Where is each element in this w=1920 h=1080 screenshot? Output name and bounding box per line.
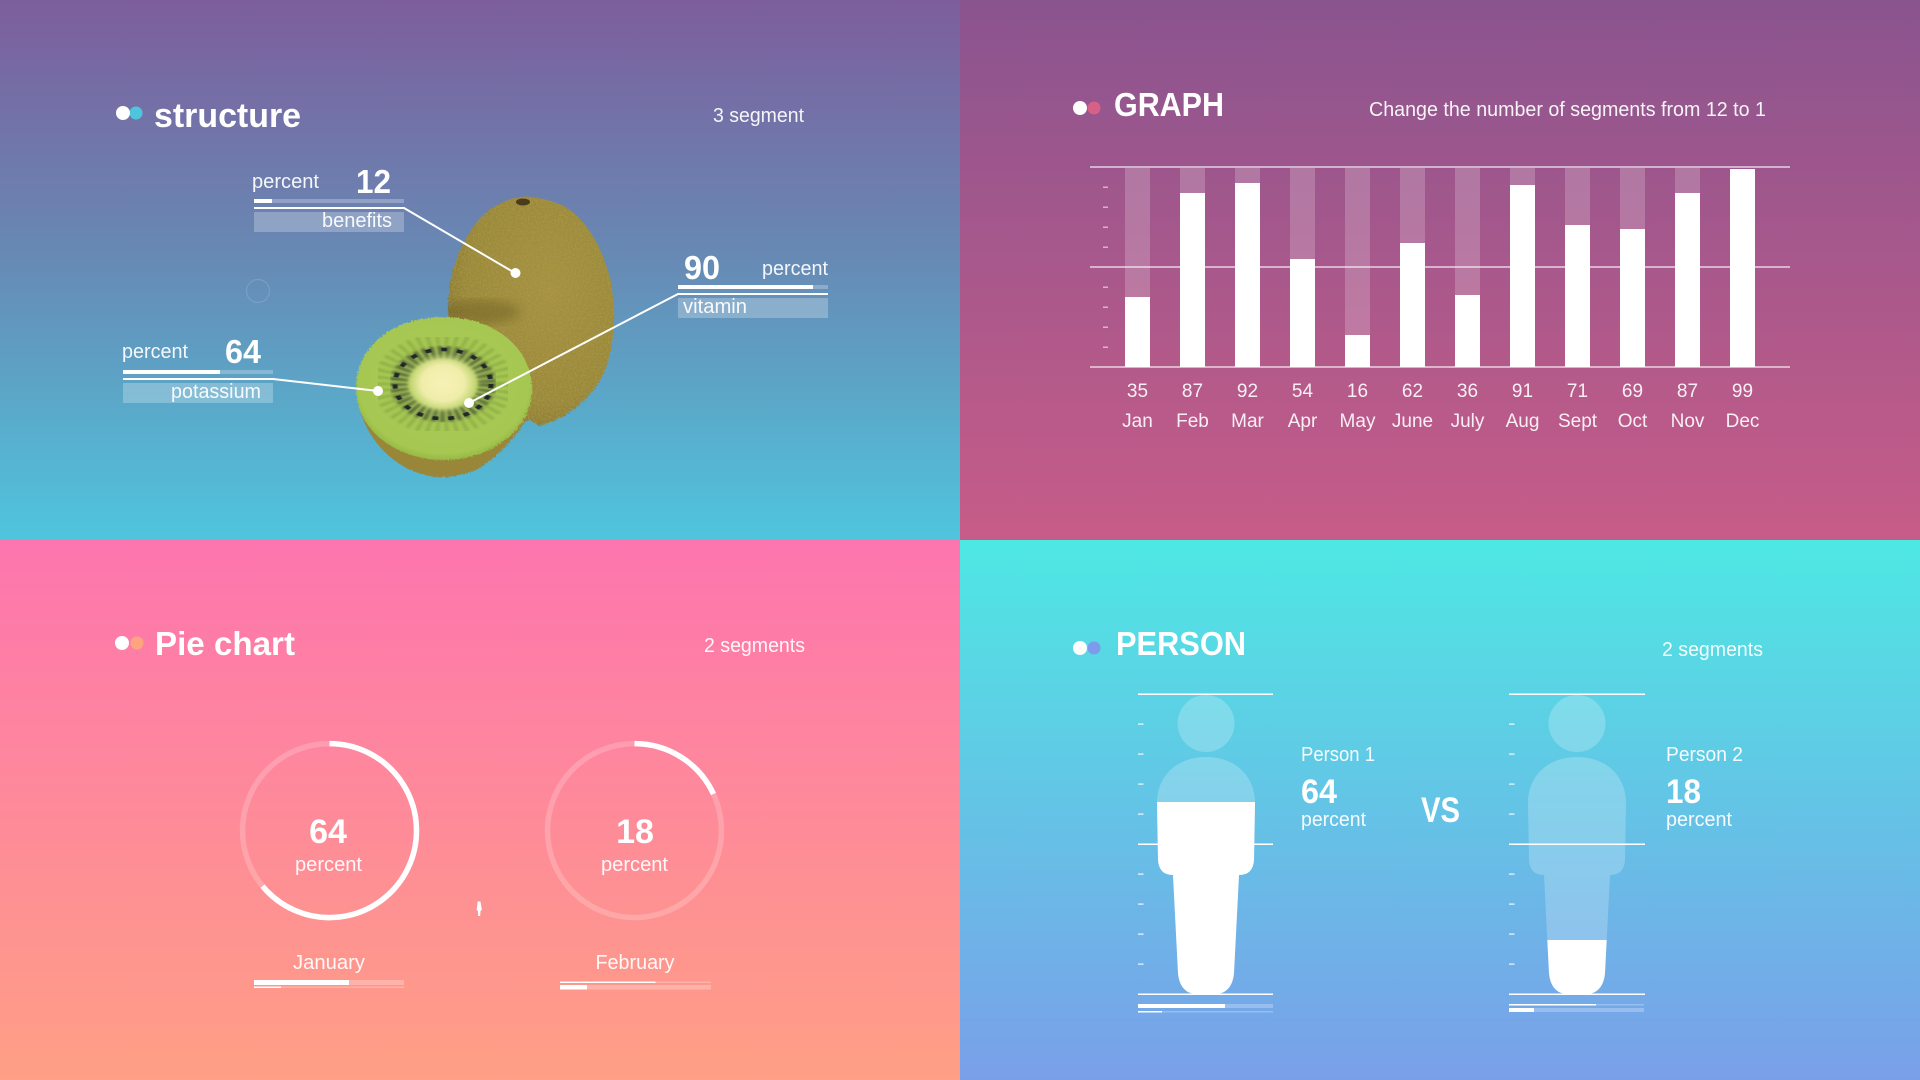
person 2 stats: 18 — [1666, 773, 1701, 811]
value labels: 92 — [1237, 381, 1258, 402]
person 2 stats: Person 2 — [1666, 744, 1743, 766]
panel: pie chart — [0, 540, 960, 1080]
donut: January 64 percent — [242, 744, 416, 918]
callout: vitamin 90 percent: vitamin — [683, 296, 747, 318]
callout: potassium 64 percent: 64 — [225, 333, 262, 370]
faint circle — [246, 280, 270, 302]
month labels: Mar — [1231, 411, 1265, 432]
month labels: Nov — [1671, 411, 1705, 432]
callout: benefits 12 percent: benefits — [322, 210, 392, 232]
value bars — [1125, 169, 1755, 367]
heading: graph: GRAPH — [1114, 86, 1224, 123]
month labels: Jan — [1122, 411, 1153, 432]
person 1 stats: Person 1 — [1301, 744, 1375, 766]
person 1 stats — [1301, 744, 1375, 831]
person 2 figure — [1509, 694, 1645, 1012]
callout: benefits 12 percent: 12 — [356, 163, 391, 200]
person 2 stats — [1666, 744, 1743, 831]
logo dots: graph — [1073, 101, 1100, 115]
person 1 figure — [1138, 694, 1273, 1012]
donut: February 18 percent: percent — [601, 854, 668, 876]
value labels: 62 — [1402, 381, 1423, 402]
donut: January 64 percent: 64 — [309, 813, 347, 851]
value labels: 36 — [1457, 381, 1478, 402]
callout: vitamin 90 percent — [464, 249, 828, 408]
callout: vitamin 90 percent: percent — [762, 258, 828, 280]
value labels: 54 — [1292, 381, 1313, 402]
donut: January 64 percent: percent — [295, 854, 362, 876]
month labels: Aug — [1506, 411, 1539, 432]
panel: graph — [960, 0, 1920, 540]
value labels: 71 — [1567, 381, 1588, 402]
month labels: Feb — [1176, 411, 1209, 432]
logo dots: pie chart — [115, 636, 144, 650]
month labels: July — [1451, 411, 1485, 432]
legend: February — [560, 952, 711, 990]
kiwi illustration — [356, 197, 614, 477]
whole kiwi — [440, 197, 614, 426]
value labels: 35 — [1127, 381, 1148, 402]
panel: structure — [0, 0, 960, 540]
heading: person: PERSON — [1116, 625, 1246, 662]
value labels: 16 — [1347, 381, 1368, 402]
month labels: May — [1340, 411, 1376, 432]
heading: structure: structure — [154, 97, 301, 135]
segment note: 2 segments — [1662, 639, 1763, 661]
value labels: 87 — [1182, 381, 1203, 402]
value labels — [1127, 381, 1753, 402]
legend: February: February — [596, 952, 674, 974]
person 1 stats: 64 — [1301, 773, 1337, 811]
segment note: Change the number of segments from 12 to 1 — [1369, 99, 1766, 121]
heading: pie chart: Pie chart — [155, 625, 295, 662]
vs label: VS — [1421, 791, 1460, 830]
month labels — [1122, 411, 1759, 432]
person 2 stats: percent — [1666, 809, 1732, 831]
person 1 stats: percent — [1301, 809, 1366, 831]
value labels: 69 — [1622, 381, 1643, 402]
month labels: Oct — [1618, 411, 1648, 432]
segment note: 3 segment — [713, 105, 804, 127]
callout: potassium 64 percent: potassium — [171, 381, 261, 403]
bar chart — [1090, 166, 1790, 432]
halved kiwi — [356, 317, 532, 477]
value labels: 91 — [1512, 381, 1533, 402]
logo dots: person — [1073, 641, 1100, 655]
callout: benefits 12 percent: percent — [252, 171, 319, 193]
segment note: 2 segments — [704, 635, 805, 657]
axis ticks — [1103, 186, 1108, 348]
panel: person — [960, 540, 1920, 1080]
background bars — [1125, 168, 1700, 335]
callout: potassium 64 percent: percent — [122, 341, 188, 363]
legend: January — [254, 952, 404, 988]
icon: tiny person — [477, 902, 482, 916]
month labels: June — [1392, 411, 1433, 432]
donut: February 18 percent: 18 — [616, 813, 654, 851]
month labels: Dec — [1726, 411, 1759, 432]
callout: vitamin 90 percent: 90 — [684, 249, 720, 286]
month labels: Sept — [1558, 411, 1598, 432]
month labels: Apr — [1288, 411, 1318, 432]
legend: January: January — [293, 952, 365, 974]
callout: potassium 64 percent — [122, 333, 383, 403]
value labels: 99 — [1732, 381, 1753, 402]
callout: benefits 12 percent — [252, 163, 520, 278]
value labels: 87 — [1677, 381, 1698, 402]
logo dots: structure — [116, 106, 142, 120]
donut: February 18 percent — [548, 744, 722, 918]
